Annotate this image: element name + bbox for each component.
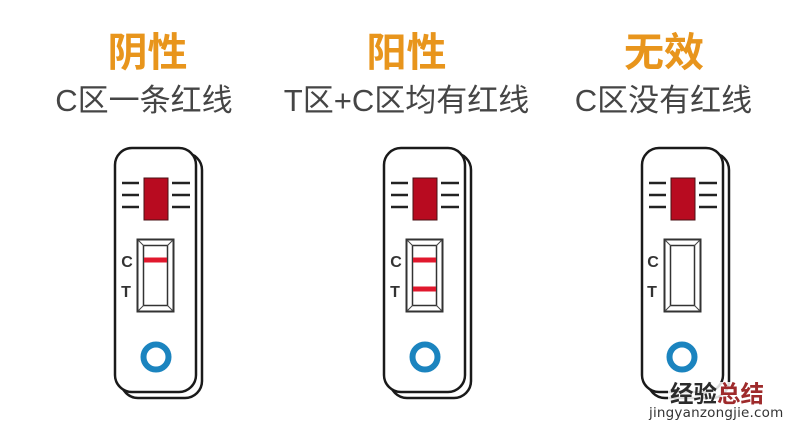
red line: T — [413, 286, 436, 292]
heading: negative: 阴性 — [108, 31, 188, 75]
label: T: T — [647, 284, 657, 301]
test cassette: negative — [115, 148, 202, 398]
label: T: T — [390, 284, 400, 301]
panel: negative result — [55, 31, 233, 398]
sample well — [412, 344, 438, 370]
label: C: C — [390, 254, 402, 271]
result window — [664, 240, 700, 312]
sample label: dark red block — [144, 178, 168, 220]
text: C zone one red line: C区一条红线 — [55, 83, 233, 118]
watermark: 经验总结 — [670, 380, 764, 407]
panel: positive result — [284, 31, 529, 398]
label: T: T — [121, 284, 131, 301]
red line: C — [413, 258, 436, 262]
watermark — [648, 380, 783, 424]
label: C: C — [121, 254, 133, 271]
panel: invalid result — [575, 31, 752, 398]
red line: C — [144, 258, 167, 262]
sample label: dark red block — [671, 178, 695, 220]
watermark: jingyanzongjie.com — [648, 405, 783, 421]
test cassette: positive — [384, 148, 471, 398]
label: C: C — [647, 254, 659, 271]
text: T zone and C zone both have red lines: T区+C区均有红线 — [284, 83, 529, 118]
test cassette: invalid — [642, 148, 729, 398]
sample well — [670, 344, 694, 370]
sample well — [144, 344, 168, 370]
text: no red line in C zone: C区没有红线 — [575, 83, 752, 118]
heading: positive: 阳性 — [366, 31, 446, 75]
result window — [406, 240, 442, 312]
result window — [138, 240, 174, 312]
heading: invalid: 无效 — [624, 31, 704, 75]
sample label: dark red block — [413, 178, 437, 220]
